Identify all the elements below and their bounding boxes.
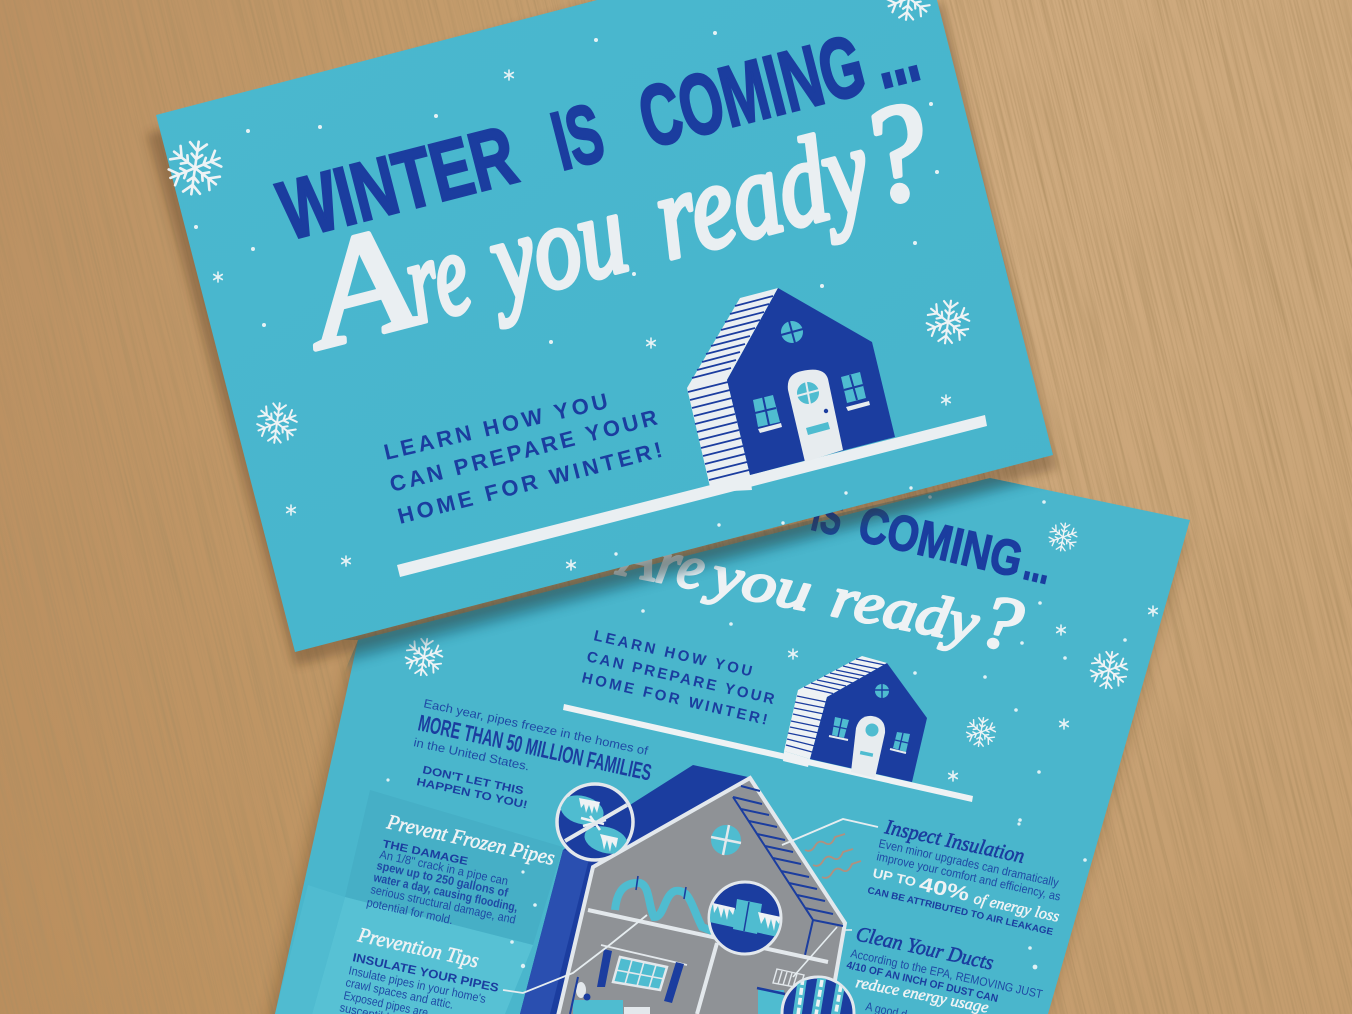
left text: prevention tips: INSULATE YOUR PIPES [351, 950, 500, 995]
title: winter is coming [270, 3, 928, 258]
tagline: learn how you can prepare [381, 388, 665, 529]
title: are you ready: you [469, 166, 639, 329]
back title: winter is coming: WINTER [590, 435, 735, 520]
intro text: pipes freeze statistic: in the United States. [412, 735, 531, 773]
snow dots [194, 31, 939, 556]
right text: clean your ducts: 4/10 OF AN INCH OF DUST CAN [845, 959, 999, 1005]
right text: inspect insulation: CAN BE ATTRIBUTED TO AIR LEAKAGE [866, 885, 1054, 938]
back card snow dots [386, 495, 1127, 969]
right window [841, 372, 870, 411]
magnifier: burst pipe no-sign [557, 784, 633, 860]
back title: are you ready [612, 520, 1029, 668]
back title: are you ready: Are [612, 520, 711, 604]
title: are you ready: ? [845, 71, 945, 235]
door round window [797, 382, 819, 404]
back title: winter is coming: COMING [854, 496, 1028, 588]
house front [727, 288, 895, 475]
right text: inspect insulation: improve your comfort and efficiency, as [875, 849, 1062, 904]
back tagline: learn how you can prepare: LEARN HOW YOU [592, 627, 754, 680]
radiator [773, 969, 804, 988]
back tagline: learn how you can prepare: CAN PREPARE YOUR [585, 648, 776, 708]
tagline: learn how you can prepare: LEARN HOW YOU [381, 388, 610, 465]
round attic window [711, 825, 741, 855]
intro text: pipes freeze statistic: HAPPEN TO YOU! [415, 776, 528, 811]
title: are you ready [282, 71, 945, 381]
right text: clean your ducts [845, 921, 1044, 1014]
left text: prevent frozen pipes: Prevent Frozen Pipes [384, 809, 557, 870]
main house cross-section illustration [520, 765, 854, 1014]
icon: heat loss wavy arrows [805, 834, 861, 878]
panel: prevention tips [312, 897, 533, 1014]
back card: infographic sheet [268, 435, 1190, 1014]
house illustration [687, 288, 895, 492]
back title: are you ready: ? [972, 578, 1029, 668]
leader line: inspect insulation [782, 819, 878, 845]
front card: postcard cover [147, 0, 1057, 666]
left window [753, 395, 782, 433]
right text: clean your ducts: According to the EPA, REMOVING JUST [849, 946, 1044, 1001]
back title: winter is coming: IS [807, 485, 849, 547]
left text: prevent frozen pipes: water a day, causing flooding, [372, 870, 519, 914]
left text: prevention tips [338, 922, 500, 1014]
back card snowflakes [402, 521, 1157, 781]
back title: winter is coming: ... [1019, 534, 1057, 595]
door handle [824, 409, 828, 413]
title: are you ready: A [282, 193, 431, 381]
tagline: learn how you can prepare: HOME FOR WINTER! [395, 437, 665, 529]
floor and wall lines [588, 910, 828, 1014]
front card surface [156, 0, 1053, 652]
left text: prevention tips: crawl spaces and attic. [344, 975, 455, 1012]
left window [829, 717, 849, 740]
right text: inspect insulation [866, 814, 1062, 938]
attic round window [781, 321, 803, 343]
white base [783, 751, 810, 767]
house front [810, 663, 927, 782]
striped side [784, 656, 887, 759]
snowflake icons [164, 0, 973, 570]
front card drop shadow [147, 4, 1057, 666]
door slot [860, 751, 873, 757]
attic insulation hatch [733, 786, 843, 955]
leader line: insulate pipes [503, 915, 647, 993]
left text: prevention tips: Prevention Tips [355, 922, 481, 973]
back card drop shadow [268, 490, 1185, 1014]
intro text: pipes freeze statistic: DON'T LET THIS [421, 764, 525, 797]
tagline: learn how you can prepare: CAN PREPARE YOUR [387, 405, 660, 497]
left text: prevention tips: Insulate pipes in your home's [347, 963, 487, 1006]
intro text: pipes freeze statistic: Each year, pipes freeze in the homes of [422, 696, 650, 758]
door slot [806, 422, 830, 435]
left text: prevent frozen pipes: serious structural damage, and [369, 882, 517, 927]
magnifier: dusty ducts [782, 975, 854, 1014]
title: winter is coming: WINTER [270, 108, 525, 258]
title: winter is coming: IS [543, 86, 612, 188]
frozen pipes [615, 883, 712, 931]
back ground line [563, 704, 973, 802]
lower rooms furniture [570, 977, 785, 1014]
right text: inspect insulation: 40% [917, 873, 972, 906]
back card surface [275, 478, 1190, 1014]
left text: prevent frozen pipes [365, 809, 557, 927]
back title: are you ready: you [701, 542, 817, 624]
grey house body [557, 778, 845, 1014]
right text: inspect insulation: of energy loss [972, 890, 1061, 926]
right text: inspect insulation: Even minor upgrades can dramatically [877, 836, 1060, 890]
door window [866, 724, 878, 736]
right text: inspect insulation: Inspect Insulation [882, 814, 1027, 868]
door [851, 716, 885, 778]
leader line: clean ducts [793, 927, 852, 977]
pipe valves [636, 876, 686, 899]
right text: inspect insulation: UP TO [871, 865, 918, 889]
back tagline: learn how you can prepare [580, 627, 776, 729]
lighter side wall strip [520, 850, 590, 1014]
blue roof and side wall [520, 765, 748, 1014]
panel: prevent frozen pipes [345, 790, 563, 945]
left text: prevent frozen pipes: An 1/8" crack in a pipe can [378, 847, 509, 888]
left text: prevent frozen pipes: THE DAMAGE [381, 838, 469, 868]
round window [875, 684, 889, 698]
intro text: pipes freeze statistic [412, 696, 654, 811]
back small house illustration [783, 656, 927, 782]
window with curtains [597, 945, 687, 1003]
back tagline: learn how you can prepare: HOME FOR WINTER! [580, 669, 769, 729]
left text: prevent frozen pipes: potential for mold. [365, 895, 454, 927]
door [788, 370, 843, 462]
left text: prevent frozen pipes: spew up to 250 gallons of [375, 858, 510, 900]
intro text: pipes freeze statistic: MORE THAN 50 MILLION FAMILIES [416, 709, 654, 786]
back title: winter is coming [590, 435, 1057, 595]
magnifier: frozen pipe joint [705, 882, 785, 954]
title: are you ready: re [391, 207, 482, 348]
shadow cast by front card on back card [342, 478, 1032, 670]
right text: clean your ducts: Clean Your Ducts [854, 921, 996, 975]
ground line [397, 415, 987, 577]
title: are you ready: ready [641, 101, 883, 285]
lower-left lighter band [275, 885, 345, 1014]
back title: are you ready: ready [827, 564, 985, 656]
striped side wall [687, 288, 778, 492]
right window [890, 732, 910, 753]
